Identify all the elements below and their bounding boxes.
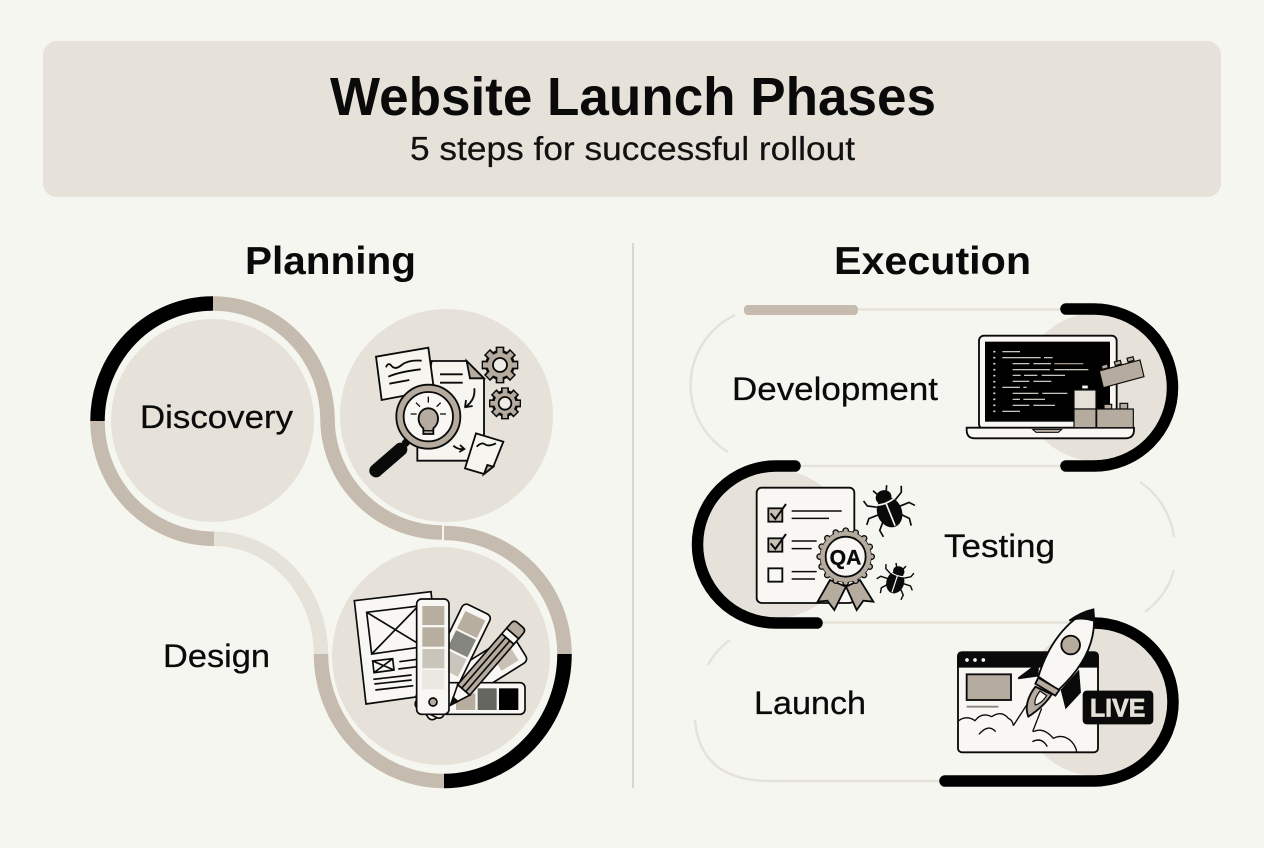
- label: design: Design: [163, 638, 270, 674]
- label: discovery: Discovery: [140, 399, 293, 435]
- bug small: [873, 559, 919, 602]
- ribbon: [818, 580, 846, 610]
- blocks: [1074, 357, 1144, 428]
- bug large: [856, 478, 921, 541]
- QA badge: [820, 531, 872, 583]
- icon: QA checklist and bugs: QA: [830, 545, 861, 569]
- step: design: [163, 547, 550, 765]
- pencil: [445, 620, 526, 710]
- icon: rocket launching a live website: [958, 609, 1153, 752]
- panel: planning: [98, 240, 564, 781]
- exhaust clouds: [959, 705, 1077, 752]
- icon: rocket launching a live website: LIVE: [1090, 695, 1145, 723]
- step: development: [691, 305, 1172, 466]
- label: launch: Launch: [754, 685, 866, 721]
- subtitle: 5 steps for successful rollout: [410, 130, 855, 167]
- magnifier: [403, 441, 408, 446]
- icon: discovery research: [340, 309, 553, 522]
- flow ring track: [98, 303, 564, 781]
- swatch fan: [414, 634, 528, 722]
- icon: QA checklist and bugs: [757, 478, 921, 610]
- step: launch: [695, 609, 1173, 781]
- icon: wireframe, swatches and pencil: [354, 592, 528, 722]
- panel: execution: [691, 240, 1174, 781]
- step: testing: [698, 466, 1174, 623]
- icon: laptop with code and blocks: [967, 336, 1144, 438]
- heading: execution: Execution: [834, 240, 1031, 283]
- title: Website Launch Phases: [330, 67, 936, 127]
- header banner: [43, 41, 1221, 197]
- heading: planning: Planning: [245, 240, 416, 283]
- gears: [482, 347, 518, 383]
- progress bar: [744, 305, 858, 315]
- rocket: [1018, 663, 1038, 678]
- label: development: Development: [732, 371, 938, 407]
- step: discovery: [111, 319, 314, 522]
- label: testing: Testing: [944, 528, 1055, 564]
- LIVE tag: [1083, 691, 1153, 724]
